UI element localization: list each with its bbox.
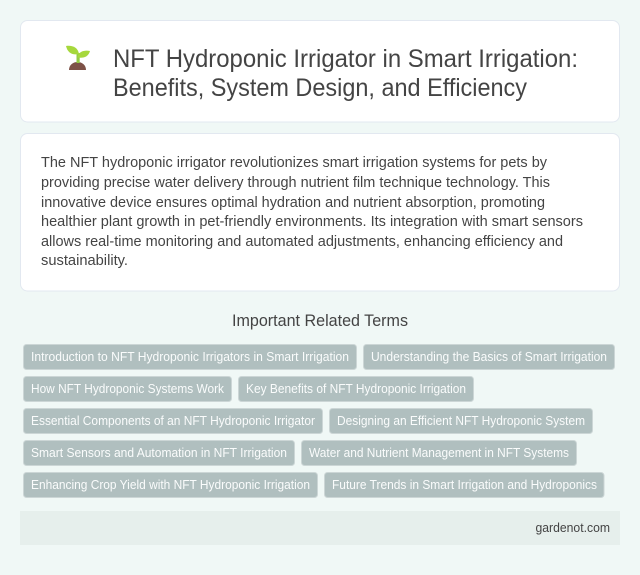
text block: description: allows real-time monitoring and automated adjustments, enhancing efficiency and	[41, 234, 563, 250]
tag: introduction	[24, 344, 356, 370]
tag: introduction: Introduction to NFT Hydroponic Irrigators in Smart Irrigation	[31, 349, 349, 364]
footer	[20, 511, 620, 545]
tag: crop yield: Enhancing Crop Yield with NFT Hydroponic Irrigation	[31, 477, 310, 492]
panel: header	[20, 20, 620, 122]
tag: basics	[364, 344, 614, 370]
text block: description: sustainability.	[41, 253, 128, 269]
tag: designing	[330, 408, 592, 434]
title: NFT Hydroponic Irrigator in Smart Irrigation:	[113, 45, 578, 73]
text block: description: The NFT hydroponic irrigator revolutionizes smart irrigation systems for pets by	[41, 155, 548, 171]
tag: components	[24, 408, 322, 434]
tag: components: Essential Components of an NFT Hydroponic Irrigator	[31, 413, 316, 428]
tag: water and nutrient: Water and Nutrient Management in NFT Systems	[309, 445, 569, 460]
tag: future trends: Future Trends in Smart Irrigation and Hydroponics	[332, 477, 597, 492]
tag: basics: Understanding the Basics of Smart Irrigation	[371, 349, 607, 364]
tag list: related terms	[24, 344, 614, 498]
text block: description: innovative device ensures optimal hydration and nutrient absorption, promoting	[41, 195, 545, 211]
title	[113, 45, 578, 102]
tag: sensors	[24, 440, 294, 466]
heading: related terms: Important Related Terms	[232, 312, 408, 330]
tag: water and nutrient	[302, 440, 576, 466]
footer: gardenot.com	[536, 520, 610, 535]
tag: how it works	[24, 376, 232, 402]
tag: how it works: How NFT Hydroponic Systems Work	[31, 381, 225, 396]
tag: crop yield	[24, 472, 318, 498]
icon: seedling	[66, 46, 90, 70]
tag: key benefits	[238, 376, 474, 402]
title: Benefits, System Design, and Efficiency	[113, 74, 527, 102]
tag: sensors: Smart Sensors and Automation in NFT Irrigation	[31, 445, 287, 460]
text block: description	[41, 155, 583, 269]
tag: future trends	[324, 472, 604, 498]
tag: designing: Designing an Efficient NFT Hydroponic System	[337, 413, 585, 428]
text block: description: healthier plant growth in pet-friendly environments. Its integration with smart sensors	[41, 214, 583, 230]
panel: description	[20, 134, 620, 291]
text block: description: providing precise water delivery through nutrient film technique technology. This	[41, 175, 550, 191]
tag: key benefits: Key Benefits of NFT Hydroponic Irrigation	[246, 381, 466, 396]
